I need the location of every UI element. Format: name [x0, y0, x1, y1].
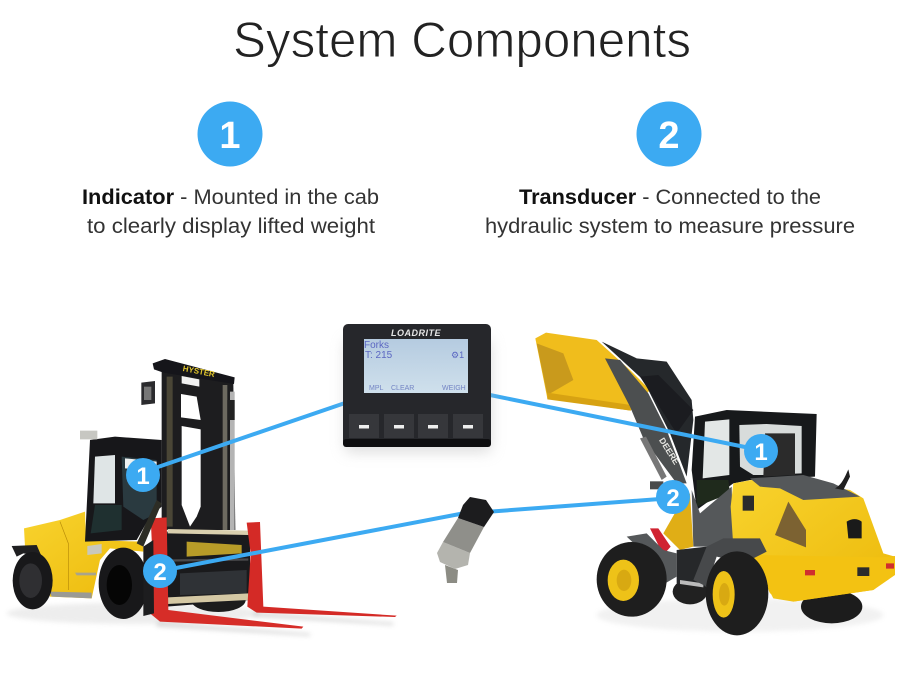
rear wheel back — [191, 588, 246, 612]
screen — [364, 339, 468, 393]
connector lines — [155, 395, 745, 568]
brand: LOADRITE — [391, 328, 441, 338]
mast: HYSTER — [182, 364, 216, 379]
map marker: loader 1 — [744, 434, 778, 468]
cab — [692, 410, 817, 510]
screen: ⚙1 — [451, 350, 464, 360]
badge 1 — [198, 102, 262, 166]
forklift — [7, 359, 397, 636]
screen: MPL — [369, 385, 384, 392]
map marker: forklift 1: 1 — [136, 463, 150, 490]
cab — [80, 431, 162, 547]
badge 2: 2 — [658, 115, 680, 157]
forks — [150, 517, 397, 629]
rear hidden wheels — [673, 579, 707, 604]
title: System Components — [233, 12, 691, 68]
fenders — [627, 533, 677, 588]
front wheels — [597, 542, 768, 635]
badge 2 — [636, 102, 702, 166]
carriage — [167, 529, 250, 607]
map marker: forklift 2 — [143, 554, 177, 588]
indicator display — [343, 324, 491, 452]
mast — [141, 359, 235, 530]
transducer description: Transducer - Connected to the — [519, 186, 821, 209]
boom arm: DEERE — [657, 436, 681, 467]
component 1: indicator heading — [82, 102, 379, 238]
line: forklift to transducer — [176, 513, 465, 568]
transducer sensor — [437, 497, 494, 583]
badge 1: 1 — [219, 115, 241, 157]
map marker: loader 1: 1 — [754, 439, 768, 466]
line: forklift to indicator — [155, 403, 345, 468]
line: transducer to loader — [485, 499, 660, 512]
map marker: forklift 2: 2 — [153, 559, 167, 586]
screen: T: 215 — [365, 350, 393, 361]
loader — [535, 333, 895, 635]
hydraulic hoses and rear linkage — [602, 342, 693, 477]
map marker: forklift 1 — [126, 458, 160, 492]
map marker: loader 2: 2 — [666, 485, 680, 512]
component 2: transducer heading — [485, 102, 855, 238]
transducer description — [485, 186, 855, 238]
body — [12, 512, 143, 598]
indicator description: Indicator - Mounted in the cab — [82, 186, 379, 209]
transducer description: hydraulic system to measure pressure — [485, 215, 855, 238]
wheels — [13, 540, 154, 619]
bucket — [535, 333, 650, 411]
line: indicator to loader — [490, 395, 745, 447]
map marker: loader 2 — [656, 480, 690, 514]
screen: WEIGH — [442, 385, 466, 392]
screen: CLEAR — [391, 385, 414, 392]
screen: Forks — [364, 340, 389, 351]
indicator description: to clearly display lifted weight — [87, 215, 375, 238]
indicator description — [82, 186, 379, 238]
body — [650, 469, 895, 602]
boom arm — [605, 358, 687, 483]
buttons — [349, 414, 483, 438]
